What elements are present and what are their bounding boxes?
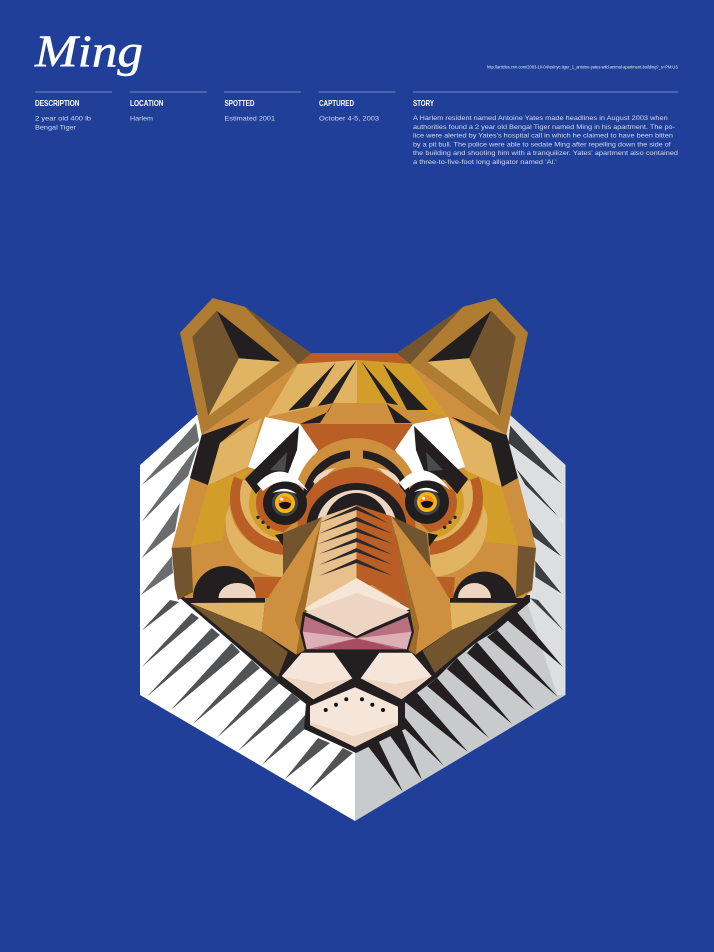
spikes: upper left [141,423,199,595]
under-face black outline [180,595,530,753]
right cheek blocks [450,417,536,598]
nose bridge [303,505,410,636]
info: story: STORY [413,99,434,108]
spikes: upper right [508,425,564,595]
spikes: lower left [142,600,353,792]
info: location [130,92,206,122]
right cheek rings [369,441,483,555]
left muzzle side [180,517,322,677]
tiger head [172,298,536,753]
right lower cheek crescent [430,505,487,577]
info: story: a three-to-five-foot long alligator named 'Al.' [413,159,557,166]
nose stripes [318,506,393,576]
forehead right [357,360,448,423]
left ear [180,298,312,435]
info: story: authorities found a 2 year old Bengal Tiger named Ming in his apartment. The po- [413,124,675,131]
info: captured [318,92,396,122]
info: spotted: Estimated 2001 [224,116,275,122]
right ear [396,298,528,435]
mouth [300,612,414,652]
central arches [294,438,418,587]
right whisker pad [361,653,432,699]
info: description: Bengal Tiger [35,124,77,132]
lower cheek semicircle right [431,572,516,598]
forehead left [267,360,357,424]
info: location: LOCATION [130,99,164,108]
info: story: by a pit bull. The police were able to sedate Ming after repelling down the side of [413,141,671,148]
title: Ming [34,27,143,77]
source url: http://articles.cnn.com/2003-10-04/us/nyc.tiger_1_antoine-yates-wild-animal-apartment-building?_s=PM:US [487,64,678,70]
left cheek rings [230,441,344,555]
chin [307,683,403,750]
forehead rust panel [300,424,413,452]
chin black triangle [330,650,383,685]
info: spotted [224,92,301,122]
left cheek blocks [172,418,262,600]
info: story: the building and shooting him with a tranquilizer. Yates' apartment also contained [413,150,678,157]
info: story [413,92,678,166]
left eye [257,472,308,525]
left brow and white patch [245,417,318,494]
hexagon backdrop with spikes [140,415,566,821]
info: story: lice were alerted by Yates's hospital call in which he claimed to have been bitten [413,133,673,140]
whisker dots [324,697,385,712]
info: description [35,92,112,132]
left whisker pad [282,653,352,699]
info: captured: CAPTURED [319,99,354,108]
forehead top band [298,353,410,364]
info: captured: October 4-5, 2003 [319,116,379,122]
left lower cheek crescent [226,505,283,577]
lower cheek semicircle left [193,566,282,598]
info: description: DESCRIPTION [35,99,80,108]
info: story: A Harlem resident named Antoine Yates made headlines in August 2003 when [413,115,668,122]
info: spotted: SPOTTED [224,99,255,108]
head base [172,353,536,603]
right eye [399,471,450,524]
info: description: 2 year old 400 lb [35,116,91,122]
right brow and white patch [395,417,468,494]
info: location: Harlem [130,116,153,122]
right muzzle side [391,516,530,673]
spikes: lower right [367,598,564,792]
